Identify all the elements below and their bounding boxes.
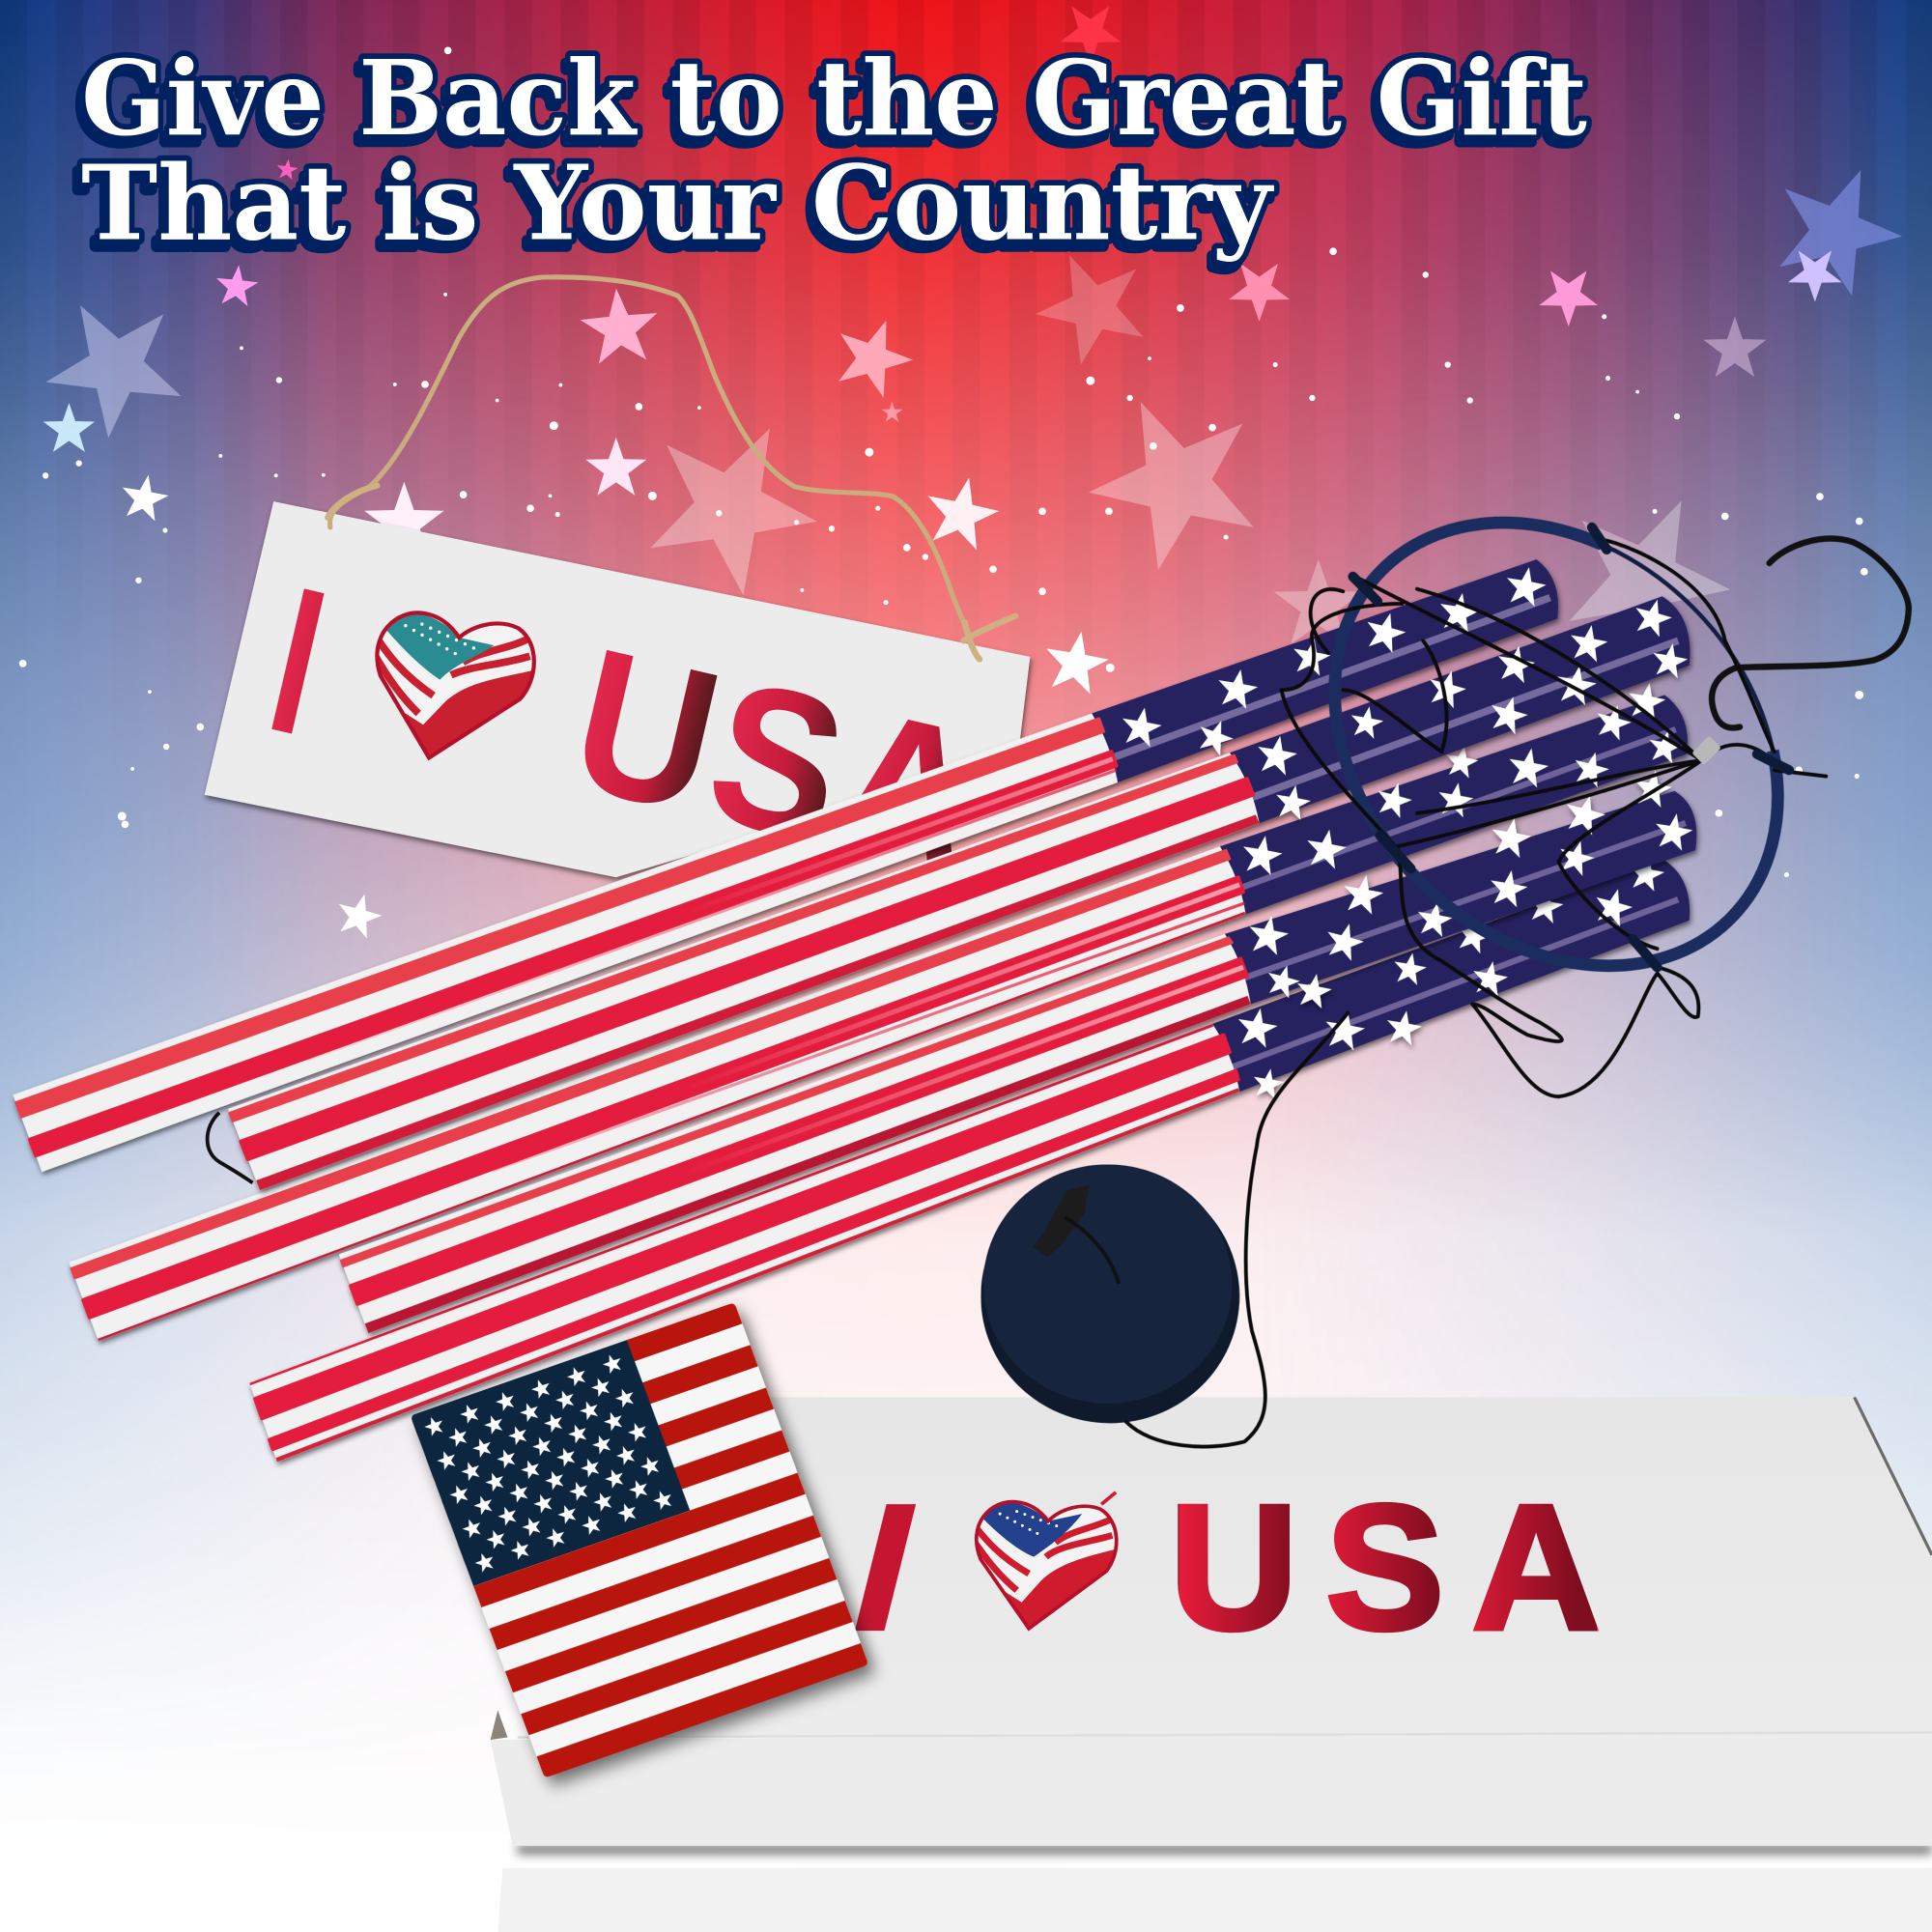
sign board (205, 501, 1030, 877)
gift box (491, 1397, 1932, 1932)
title: Give Back to the Great Gift (81, 38, 1587, 159)
box shadow (518, 1844, 1932, 1855)
sign lettering: I: I (252, 543, 344, 780)
jute hanging cord (329, 277, 971, 640)
hanging sign (205, 277, 1030, 918)
decorative stars (21, 6, 1919, 941)
tube 2 (228, 595, 1690, 1190)
box front (491, 1731, 1932, 1846)
box top (529, 1397, 1932, 1737)
box lettering: I: I (836, 1467, 935, 1667)
box lower tray (497, 1868, 1932, 1932)
sign heart (375, 611, 536, 761)
chime tubes (13, 559, 1696, 1462)
title: That is Your Country (81, 142, 1274, 264)
tube 3 (69, 680, 1688, 1341)
small American flag plaque (411, 1302, 868, 1778)
black loop at chime ends (208, 1113, 252, 1182)
hook (1712, 539, 1909, 727)
tube 1 (13, 559, 1558, 1172)
box lettering: USA: USA (1169, 1468, 1601, 1667)
sparkle dots (19, 46, 1868, 877)
tube 5 (249, 854, 1690, 1462)
suspension cords and knots (1126, 538, 1826, 1447)
hanging ring (1245, 433, 1867, 1055)
metal crimp (1691, 735, 1721, 765)
wooden wind catcher disc (980, 1164, 1239, 1423)
title (81, 38, 1587, 264)
box heart (967, 1492, 1124, 1629)
ring knots (1353, 527, 1789, 967)
sign lettering: USA: USA (554, 604, 1004, 918)
box notch (491, 1710, 508, 1740)
tube 4 (339, 767, 1696, 1333)
